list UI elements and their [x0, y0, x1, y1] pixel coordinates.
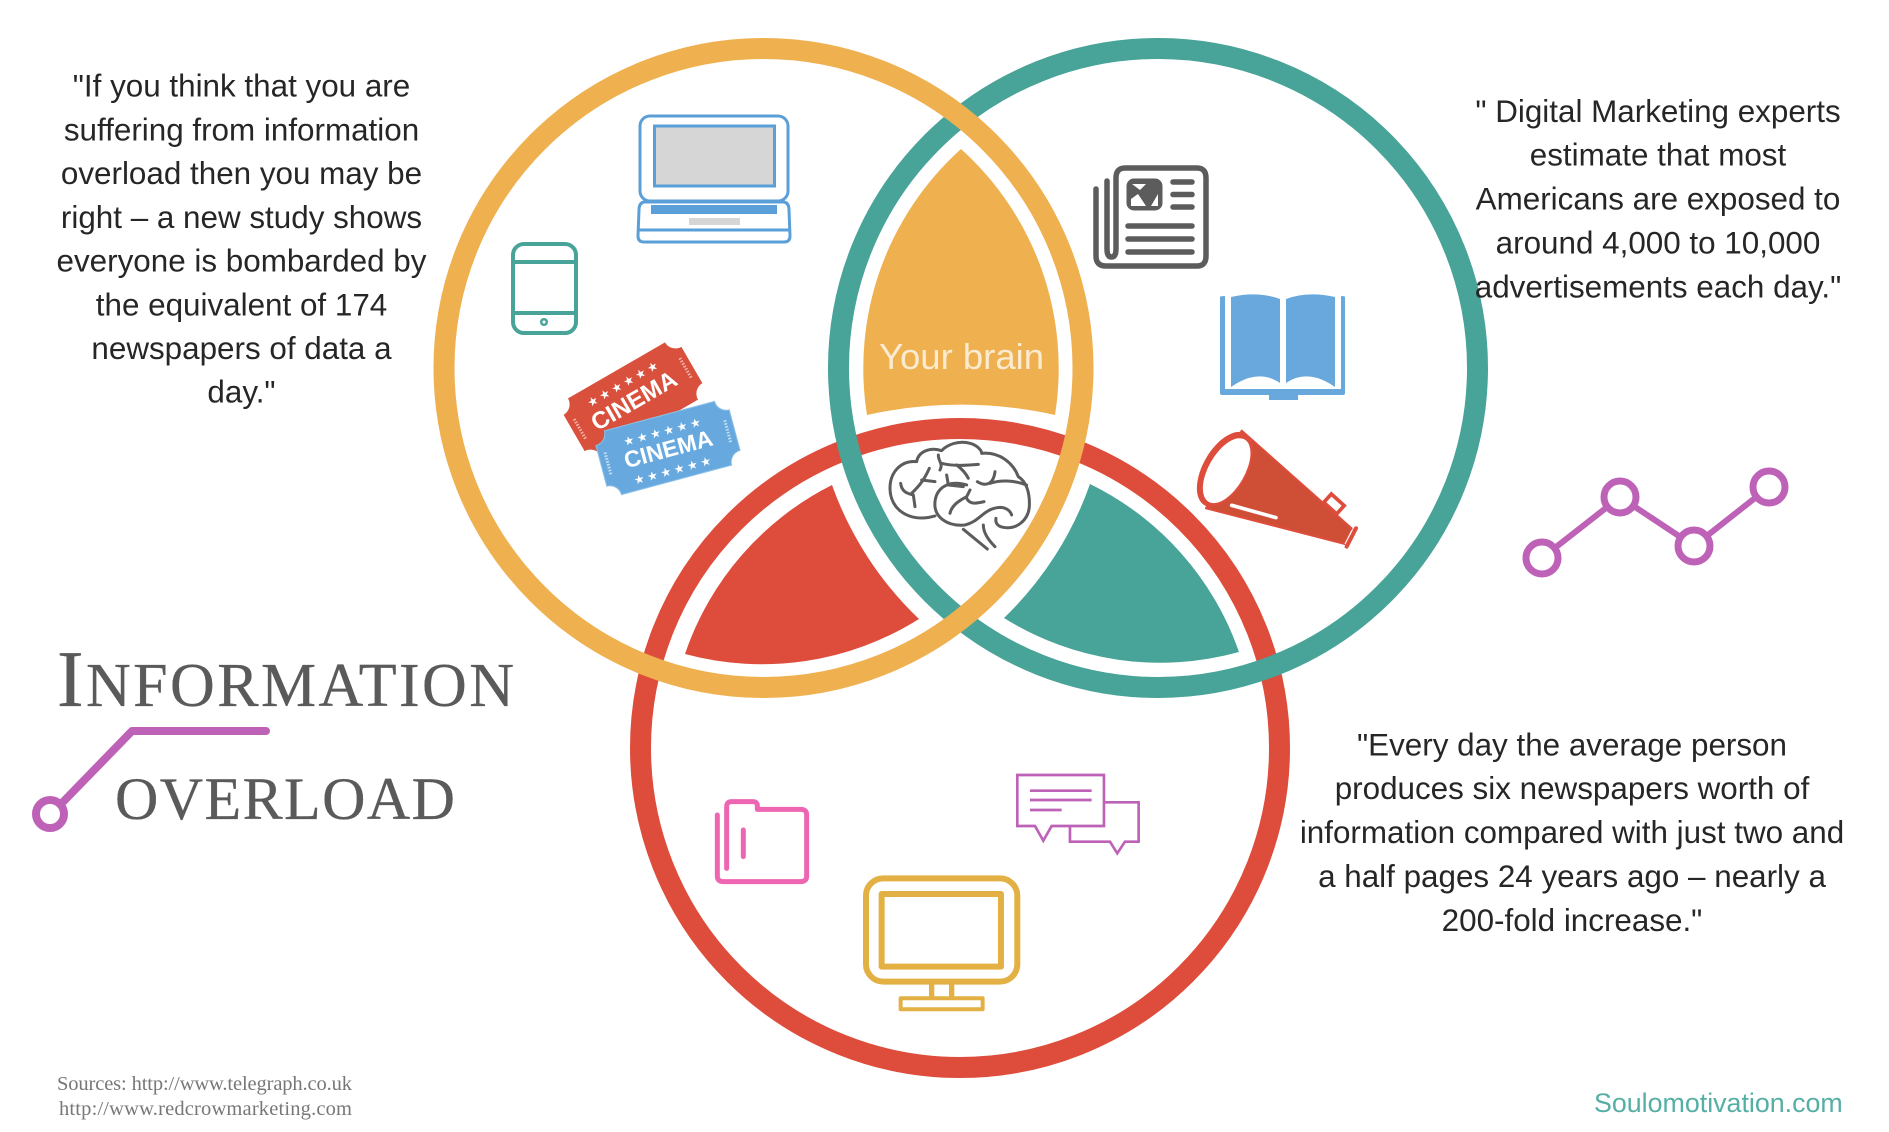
icon: brain — [890, 442, 1029, 549]
quote: information overload study: "If you think that you are — [73, 68, 410, 104]
icon: newspaper — [1096, 168, 1206, 266]
sources: Sources: http://www.telegraph.co.uk — [57, 1073, 353, 1095]
icon: blue cinema ticket: CINEMA — [621, 425, 715, 473]
quote: information overload study: newspapers of data a — [91, 331, 392, 366]
quote: average person: 200-fold increase." — [1442, 903, 1702, 938]
icon: chat bubbles — [1017, 775, 1139, 853]
quote: information overload study: suffering from information — [64, 112, 419, 148]
icon: blue cinema ticket — [593, 398, 743, 498]
quote: digital marketing: Americans are exposed to — [1476, 182, 1840, 216]
icon: tablet — [513, 244, 576, 333]
quote: digital marketing: advertisements each day." — [1475, 270, 1841, 304]
petal: teal — [1004, 484, 1239, 663]
title connector line — [36, 731, 266, 828]
petal: red — [685, 485, 919, 664]
credit: Soulomotivation.com — [1594, 1088, 1843, 1118]
quote: average person — [1300, 728, 1844, 938]
icon: folder — [717, 802, 807, 882]
icon: open book — [1220, 294, 1345, 400]
quote: information overload study: day." — [207, 374, 276, 410]
quote: information overload study: right – a new study shows — [61, 200, 422, 235]
ring: teal — [838, 48, 1478, 688]
icon: blue cinema ticket: ★★★★★★ — [632, 453, 716, 488]
icon: red cinema ticket — [558, 336, 708, 462]
quote: digital marketing: " Digital Marketing experts — [1475, 94, 1841, 129]
quote: average person: a half pages 24 years ago – nearly a — [1318, 859, 1826, 894]
quote: average person: information compared with just two and — [1300, 815, 1844, 850]
icon: red cinema ticket: ★★★★★★ — [585, 357, 663, 410]
quote: average person: "Every day the average person — [1357, 728, 1787, 762]
sources — [57, 1073, 353, 1120]
ring: orange — [444, 48, 1083, 688]
quote: information overload study — [57, 68, 427, 410]
quote: information overload study: everyone is bombarded by — [57, 244, 427, 278]
icon: megaphone — [1185, 423, 1356, 547]
icon: blue cinema ticket: ★★★★★★ — [622, 414, 705, 449]
quote: average person: produces six newspapers worth of — [1335, 771, 1810, 806]
petal: your brain: Your brain — [879, 336, 1044, 377]
quote: digital marketing — [1475, 94, 1841, 304]
quote: information overload study: the equivalent of 174 — [96, 288, 387, 322]
sources: http://www.redcrowmarketing.com — [59, 1098, 352, 1120]
line chart decoration — [1526, 471, 1785, 574]
quote: digital marketing: estimate that most — [1530, 138, 1787, 172]
venn diagram — [444, 48, 1478, 1068]
quote: information overload study: overload then you may be — [61, 156, 422, 191]
title: INFORMATION — [57, 636, 514, 724]
quote: digital marketing: around 4,000 to 10,000 — [1496, 226, 1820, 260]
title — [57, 636, 514, 832]
icon: red cinema ticket: CINEMA — [587, 366, 682, 437]
ring: red — [640, 428, 1280, 1068]
icon: laptop — [638, 116, 790, 242]
icon: monitor — [866, 878, 1017, 1009]
title: OVERLOAD — [115, 766, 455, 832]
petal: your brain — [863, 149, 1059, 415]
